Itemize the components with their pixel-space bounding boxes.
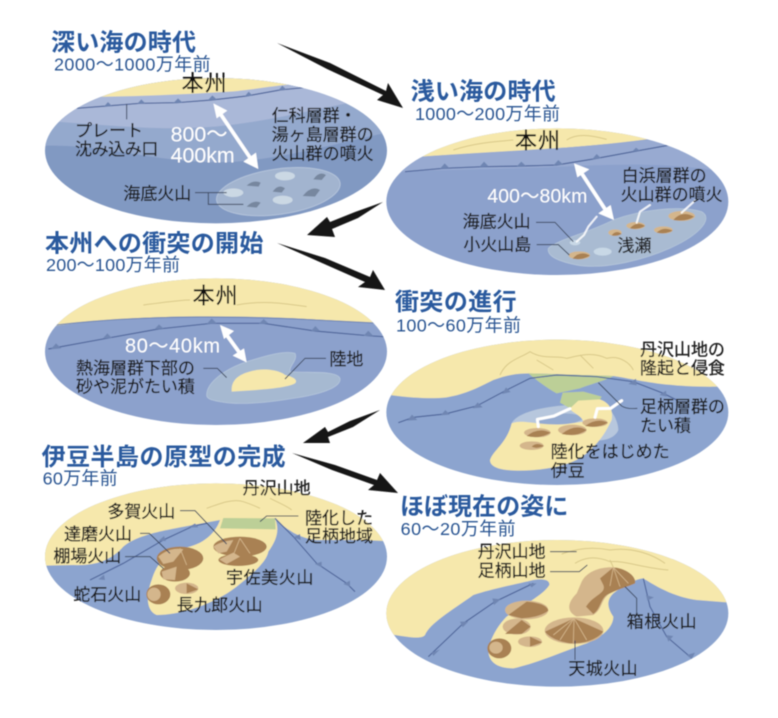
heading: ほぼ現在の姿に: ほぼ現在の姿に	[400, 493, 568, 520]
sediment zone	[207, 352, 340, 403]
volcano: Hakone ridge	[569, 567, 635, 617]
volcano: Amagi	[545, 617, 603, 644]
label: eruption: 白浜層群の	[622, 167, 707, 186]
arrow: 2 to 3	[307, 202, 383, 237]
label: distance: 800〜	[171, 123, 228, 147]
shallows	[548, 209, 706, 266]
label: 天城火山: 天城火山	[568, 659, 638, 678]
light zone	[512, 405, 619, 441]
label: 足柄層群のたい積: たい積	[640, 417, 691, 436]
label: plate: 沈み込み口	[75, 140, 158, 159]
label: 丹沢山地の隆起と侵食: 丹沢山地の	[640, 340, 725, 359]
subheading: age: 200〜100万年前	[46, 255, 180, 275]
panel: 衝突の進行	[380, 289, 750, 490]
map: deep sea	[44, 77, 388, 224]
label: 宇佐美火山: 宇佐美火山	[226, 568, 313, 587]
label: 丹沢山地: 丹沢山地	[478, 542, 546, 561]
panel: 本州への衝突の開始	[30, 231, 400, 435]
heading: 伊豆半島の原型の完成: 伊豆半島の原型の完成	[42, 444, 286, 471]
label: 丹沢山地: 丹沢山地	[243, 479, 311, 498]
label: 陸化をはじめた伊豆: 伊豆	[551, 462, 585, 481]
volcanoes	[146, 537, 267, 604]
label: eruption: 火山群の噴火	[621, 186, 723, 205]
label: 本州: 本州	[182, 71, 227, 96]
heading: 浅い海の時代: 浅い海の時代	[411, 78, 556, 105]
subheading: age: 100〜60万年前	[396, 316, 521, 336]
label: eruption: 湯ヶ島層群の	[272, 126, 374, 145]
arrow: 5 to 6	[292, 453, 398, 493]
heading: 深い海の時代: 深い海の時代	[51, 30, 196, 57]
volcanoes	[520, 418, 608, 450]
label: eruption: 火山群の噴火	[272, 144, 374, 163]
volcanoes	[569, 211, 695, 259]
panel: ほぼ現在の姿に	[380, 493, 750, 690]
label: 足柄層群のたい積: 足柄層群の	[640, 398, 725, 417]
arrow: 3 to 4	[277, 243, 385, 290]
label: 海底火山: 海底火山	[463, 212, 531, 231]
panel: 深い海の時代	[30, 30, 400, 230]
label: 浅瀬: 浅瀬	[617, 237, 651, 256]
label: 丹沢山地の隆起と侵食: 隆起と侵食	[640, 359, 725, 378]
volcano field	[216, 166, 341, 217]
label: sediment: 熱海層群下部の	[76, 359, 195, 378]
peninsula	[148, 518, 277, 615]
label: 長九郎火山: 長九郎火山	[177, 596, 263, 615]
map: Izu prototype	[44, 482, 388, 631]
map: progress of collision	[386, 339, 729, 486]
label: 海底火山: 海底火山	[123, 184, 191, 203]
label: 本州: 本州	[193, 283, 238, 308]
label: 棚場火山: 棚場火山	[53, 547, 121, 566]
Izu land	[490, 398, 612, 471]
panel: 浅い海の時代	[380, 78, 750, 280]
label: 本州: 本州	[515, 128, 560, 153]
label: 多賀火山: 多賀火山	[107, 503, 175, 522]
label: 足柄山地: 足柄山地	[478, 562, 546, 581]
map: start of collision	[44, 278, 388, 426]
green uplift	[528, 373, 613, 393]
map: shallow sea	[386, 128, 729, 276]
label: 陸化した足柄地域: 陸化した	[305, 509, 373, 528]
arrow: distance	[220, 325, 247, 362]
arrow: 4 to 5	[303, 410, 380, 443]
volcanoes: south-west	[487, 601, 548, 658]
label: 陸化した足柄地域: 足柄地域	[305, 527, 373, 546]
label: 陸地: 陸地	[329, 350, 363, 369]
label: 蛇石火山: 蛇石火山	[73, 586, 141, 605]
arrow: 1 to 2	[277, 43, 403, 108]
Ashigara	[220, 518, 276, 529]
label: 小火山島: 小火山島	[463, 235, 531, 254]
land	[232, 370, 296, 392]
label: sediment: 砂や泥がたい積	[76, 377, 195, 396]
subheading: age: 1000〜200万年前	[415, 104, 560, 124]
subheading: age: 2000〜1000万年前	[54, 55, 211, 75]
label: 達磨火山: 達磨火山	[64, 525, 132, 544]
subheading: age: 60万年前	[43, 468, 118, 488]
label: plate: プレート	[75, 122, 143, 141]
subheading: age: 60〜20万年前	[401, 519, 516, 539]
label: 箱根火山: 箱根火山	[627, 613, 697, 632]
plumes	[577, 201, 695, 242]
heading: 本州への衝突の開始: 本州への衝突の開始	[45, 231, 263, 258]
label: eruption: 仁科層群・	[272, 107, 357, 126]
label: distance: 80〜40km	[125, 335, 220, 357]
label: distance: 400km	[171, 143, 235, 167]
arrow: distance	[574, 163, 614, 220]
label: 陸化をはじめた伊豆: 陸化をはじめた	[551, 442, 670, 461]
arrow: distance	[213, 103, 258, 169]
map: present form	[386, 540, 729, 688]
plumes	[537, 401, 622, 427]
label: distance: 400〜80km	[487, 186, 587, 207]
heading: 衝突の進行: 衝突の進行	[395, 289, 517, 316]
panel: 伊豆半島の原型の完成	[30, 444, 400, 640]
